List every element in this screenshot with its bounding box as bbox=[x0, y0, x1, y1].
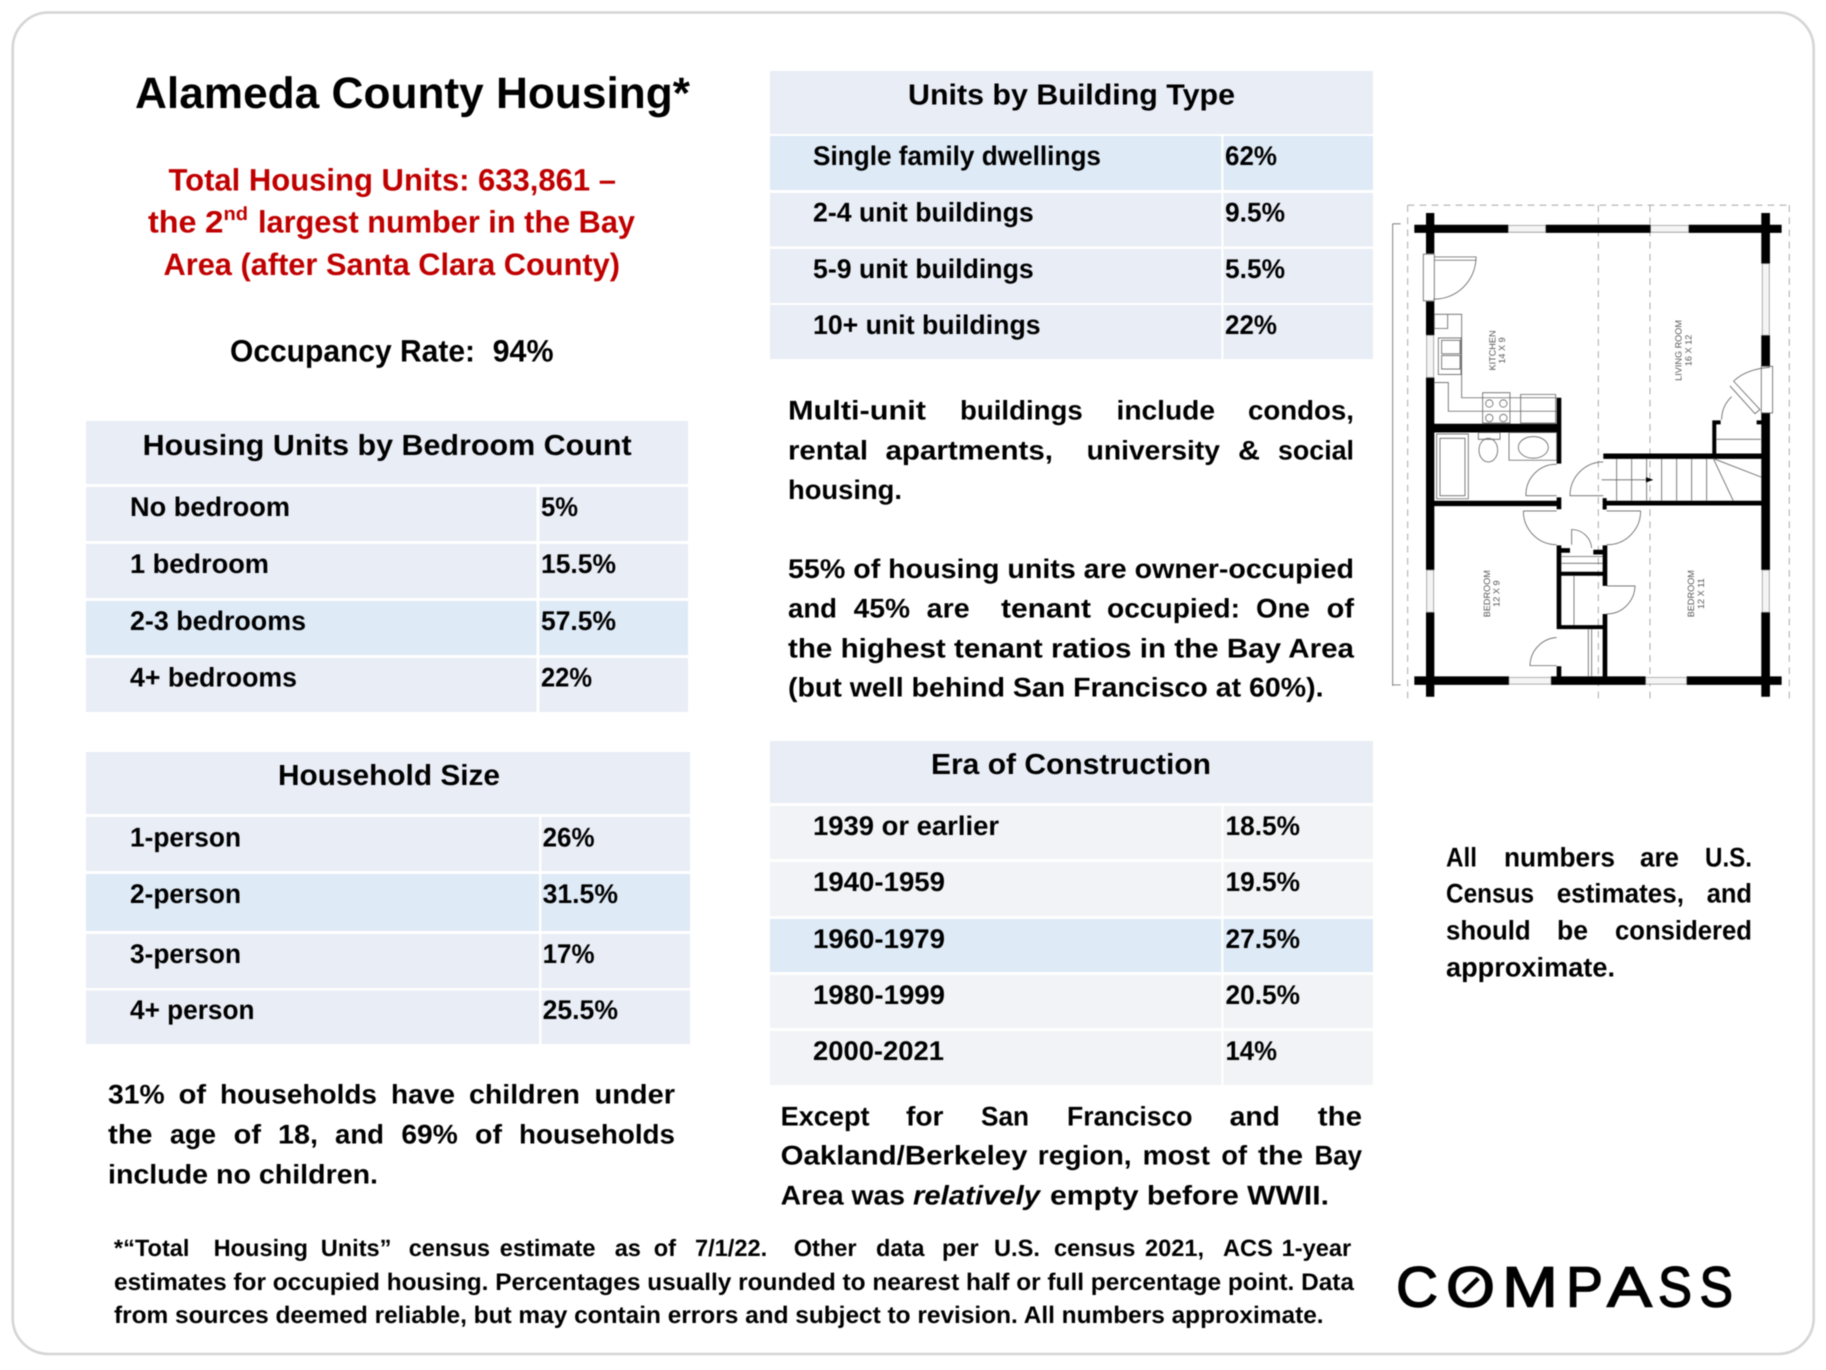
footnote: 1-year bbox=[1282, 1236, 1351, 1262]
footnote: estimate bbox=[500, 1236, 596, 1262]
text block: owner and tenant occupancy: and bbox=[788, 594, 837, 624]
row: 1939 or earlier: 18.5% bbox=[1226, 811, 1300, 841]
text block: owner and tenant occupancy: 55% of housing units are owner-occupied bbox=[788, 554, 1354, 584]
text block: multi-unit buildings: buildings bbox=[960, 396, 1083, 426]
row: 2-4 unit buildings bbox=[770, 193, 1373, 246]
row: 10+ unit buildings: 22% bbox=[1225, 310, 1277, 340]
row: no bedroom bbox=[86, 487, 688, 541]
footnote: census bbox=[409, 1236, 490, 1262]
row: 2-4 unit buildings: 9.5% bbox=[1225, 198, 1285, 228]
row: 1980-1999 bbox=[770, 975, 1373, 1028]
text block: owner and tenant occupancy: 45% bbox=[854, 594, 910, 624]
table header: Units by Building Type bbox=[908, 80, 1235, 112]
row: 1980-1999: 20.5% bbox=[1226, 980, 1300, 1010]
text block: multi-unit buildings: housing. bbox=[788, 475, 902, 505]
floor plan illustration: BEDROOM bbox=[1482, 570, 1492, 617]
row: 2000-2021: 14% bbox=[1226, 1036, 1277, 1066]
logo: Compass: A bbox=[1607, 1256, 1652, 1320]
logo: Compass: S bbox=[1700, 1256, 1733, 1320]
text block: owner and tenant occupancy: occupied: bbox=[1107, 594, 1240, 624]
row: 3-person: 3-person bbox=[130, 939, 241, 969]
row: 1960-1979 bbox=[770, 919, 1373, 972]
floor plan illustration: BEDROOM bbox=[1686, 570, 1696, 617]
row: 2-person: 31.5% bbox=[543, 879, 618, 909]
text block: multi-unit buildings: rental bbox=[788, 436, 868, 466]
footnote: 7/1/22. bbox=[695, 1236, 767, 1262]
text block: owner and tenant occupancy: tenant bbox=[1001, 594, 1091, 624]
text block: owner and tenant occupancy: are bbox=[927, 594, 970, 624]
callout: total housing units: the bbox=[148, 205, 196, 240]
logo: Compass: C bbox=[1396, 1256, 1438, 1320]
floor plan illustration: KITCHEN bbox=[1487, 330, 1497, 370]
text block: multi-unit buildings: university bbox=[1087, 436, 1220, 466]
table header: Household Size bbox=[278, 760, 500, 792]
text block: empty before WWII: the bbox=[1258, 1141, 1303, 1171]
row: 1960-1979: 27.5% bbox=[1226, 924, 1300, 954]
floor plan illustration: LIVING ROOM bbox=[1674, 320, 1684, 381]
callout: total housing units: nd bbox=[224, 204, 248, 225]
row: 1940-1959 bbox=[770, 862, 1373, 916]
text block: empty before WWII: region, bbox=[1038, 1141, 1132, 1171]
row: 2000-2021: 2000-2021 bbox=[813, 1036, 944, 1066]
text block: empty before WWII: and bbox=[1230, 1102, 1280, 1132]
text block: owner and tenant occupancy: of bbox=[1327, 594, 1355, 624]
row: 2-4 unit buildings: 2-4 unit buildings bbox=[813, 198, 1034, 228]
row: 10+ unit buildings: 10+ unit buildings bbox=[813, 310, 1041, 340]
text block: multi-unit buildings: include bbox=[1116, 396, 1215, 426]
text block: empty before WWII: most bbox=[1143, 1141, 1210, 1171]
text block: multi-unit buildings: condos, bbox=[1248, 396, 1354, 426]
text block: owner and tenant occupancy: (but well behind San Francisco at 60%). bbox=[788, 673, 1324, 703]
row: 2000-2021 bbox=[770, 1031, 1373, 1085]
text block: households with children: households bbox=[519, 1120, 675, 1150]
floor plan illustration: 12 X 11 bbox=[1696, 578, 1706, 609]
logo: Compass: M bbox=[1502, 1256, 1558, 1320]
row: no bedroom: No bedroom bbox=[130, 492, 290, 522]
panel: household size bbox=[86, 752, 690, 1044]
text block: census note: Census bbox=[1446, 879, 1534, 909]
row: 4+ person: 4+ person bbox=[130, 995, 254, 1025]
callout: total housing units: Total Housing Units: 633,861 – bbox=[168, 163, 616, 198]
text block: census note bbox=[1446, 843, 1752, 983]
table header: Era of Construction bbox=[931, 749, 1211, 781]
footnote: of bbox=[654, 1236, 676, 1262]
text block: households with children: 18, bbox=[278, 1120, 318, 1150]
floor plan illustration: 12 X 9 bbox=[1491, 580, 1501, 607]
footnote: census bbox=[1054, 1236, 1135, 1262]
footnote: per bbox=[942, 1236, 979, 1262]
row: 1 bedroom: 15.5% bbox=[541, 549, 616, 579]
row: 1 bedroom bbox=[86, 544, 688, 598]
row: single family dwellings bbox=[770, 136, 1373, 190]
logo: Compass: O bbox=[1446, 1256, 1495, 1320]
text block: households with children: of bbox=[179, 1080, 207, 1110]
row: 2-3 bedrooms: 57.5% bbox=[541, 606, 616, 636]
row: 4+ bedrooms: 4+ bedrooms bbox=[130, 662, 297, 692]
panel: units by building type bbox=[770, 71, 1373, 359]
row: 1940-1959: 1940-1959 bbox=[813, 867, 945, 897]
table header bbox=[770, 71, 1373, 134]
text block: empty before WWII: Oakland/Berkeley bbox=[781, 1141, 1028, 1171]
row: 1939 or earlier: 1939 or earlier bbox=[813, 811, 999, 841]
row: 1-person: 26% bbox=[543, 822, 595, 852]
text block: households with children: under bbox=[594, 1080, 676, 1110]
text block: households with children: include no children. bbox=[108, 1160, 378, 1190]
row: 2-3 bedrooms bbox=[86, 601, 688, 655]
occupancy rate: Occupancy Rate: bbox=[230, 334, 475, 369]
row: single family dwellings: 62% bbox=[1225, 141, 1277, 171]
text block: multi-unit buildings: social bbox=[1278, 436, 1354, 466]
callout: total housing units: 2 bbox=[205, 205, 224, 240]
table header bbox=[86, 752, 690, 814]
logo: Compass bbox=[1396, 1256, 1733, 1320]
row: 2-person bbox=[86, 874, 690, 931]
row: single family dwellings: Single family dwellings bbox=[813, 141, 1101, 171]
text block: census note: approximate. bbox=[1446, 953, 1615, 983]
text block: empty before WWII: empty before WWII. bbox=[1050, 1181, 1329, 1211]
row: 5-9 unit buildings bbox=[770, 249, 1373, 303]
floor plan illustration bbox=[1393, 205, 1789, 702]
floor plan illustration: 14 X 9 bbox=[1497, 337, 1507, 364]
row: 4+ bedrooms: 22% bbox=[541, 662, 592, 692]
footnote: *“Total bbox=[114, 1236, 189, 1262]
footnote: U.S. bbox=[994, 1236, 1040, 1262]
footnote: estimates for occupied housing. Percentages usually rounded to nearest half or full percentage point. Data bbox=[114, 1269, 1355, 1296]
text block: census note: are bbox=[1640, 843, 1679, 873]
text block: census note: considered bbox=[1615, 916, 1752, 946]
text block: census note: and bbox=[1707, 879, 1752, 909]
row: 4+ person: 25.5% bbox=[543, 995, 618, 1025]
text block: multi-unit buildings: Multi-unit bbox=[788, 396, 926, 426]
text block: households with children: children bbox=[469, 1080, 580, 1110]
text block: empty before WWII: Francisco bbox=[1067, 1102, 1192, 1132]
text block: households with children: of bbox=[475, 1120, 503, 1150]
text block: empty before WWII bbox=[781, 1102, 1362, 1211]
text block: census note: U.S. bbox=[1705, 843, 1752, 873]
text block: multi-unit buildings: & bbox=[1238, 436, 1260, 466]
text block: empty before WWII: San bbox=[981, 1102, 1029, 1132]
row: 1 bedroom: 1 bedroom bbox=[130, 549, 269, 579]
row: 1960-1979: 1960-1979 bbox=[813, 924, 945, 954]
row: 1939 or earlier bbox=[770, 806, 1373, 859]
text block: households with children: of bbox=[234, 1120, 262, 1150]
text block: census note: estimates, bbox=[1557, 879, 1684, 909]
table header bbox=[86, 421, 688, 484]
footnote: 2021, bbox=[1145, 1236, 1204, 1262]
text block: empty before WWII: relatively bbox=[913, 1181, 1042, 1211]
footnote: Other bbox=[794, 1236, 857, 1262]
text block: multi-unit buildings bbox=[788, 396, 1354, 505]
row: 10+ unit buildings bbox=[770, 305, 1373, 359]
text block: empty before WWII: of bbox=[1221, 1141, 1248, 1171]
row: no bedroom: 5% bbox=[541, 492, 578, 522]
text block: empty before WWII: Except bbox=[781, 1102, 870, 1132]
footnote: as bbox=[615, 1236, 641, 1262]
text block: census note: be bbox=[1557, 916, 1588, 946]
footnote: from sources deemed reliable, but may contain errors and subject to revision. All numbers approximate. bbox=[114, 1302, 1324, 1329]
row: 4+ person bbox=[86, 990, 690, 1044]
text block: empty before WWII: Bay bbox=[1314, 1141, 1362, 1171]
text block: households with children: and bbox=[335, 1120, 384, 1150]
row: 1-person: 1-person bbox=[130, 822, 241, 852]
text block: census note: numbers bbox=[1504, 843, 1615, 873]
text block: census note: All bbox=[1446, 843, 1477, 873]
footnote bbox=[114, 1236, 1355, 1329]
callout: total housing units: Area (after Santa Clara County) bbox=[164, 247, 620, 282]
table header: Housing Units by Bedroom Count bbox=[143, 430, 632, 462]
text block: empty before WWII: Area was bbox=[781, 1181, 905, 1211]
panel: housing units by bedroom count bbox=[86, 421, 688, 712]
panel: era of construction bbox=[770, 741, 1373, 1085]
footnote: ACS bbox=[1223, 1236, 1273, 1262]
footnote: Housing bbox=[214, 1236, 308, 1262]
text block: owner and tenant occupancy: the highest tenant ratios in the Bay Area bbox=[788, 634, 1355, 664]
row: 2-3 bedrooms: 2-3 bedrooms bbox=[130, 606, 306, 636]
text block: households with children bbox=[108, 1080, 676, 1190]
table header bbox=[770, 741, 1373, 803]
text block: owner and tenant occupancy: One bbox=[1256, 594, 1310, 624]
row: 5-9 unit buildings: 5.5% bbox=[1225, 254, 1285, 284]
logo: Compass: S bbox=[1658, 1256, 1692, 1320]
text block: empty before WWII: the bbox=[1318, 1102, 1362, 1132]
row: 5-9 unit buildings: 5-9 unit buildings bbox=[813, 254, 1034, 284]
row: 1940-1959: 19.5% bbox=[1226, 867, 1300, 897]
text block: households with children: 31% bbox=[108, 1080, 165, 1110]
logo: Compass: P bbox=[1566, 1256, 1603, 1320]
callout: total housing units bbox=[148, 163, 636, 282]
text block: census note: should bbox=[1446, 916, 1531, 946]
text block: households with children: the bbox=[108, 1120, 152, 1150]
occupancy rate: 94% bbox=[493, 334, 554, 369]
footnote: data bbox=[876, 1236, 925, 1262]
text block: multi-unit buildings: apartments, bbox=[886, 436, 1053, 466]
row: 4+ bedrooms bbox=[86, 658, 688, 712]
text block: empty before WWII: for bbox=[906, 1102, 944, 1132]
row: 2-person: 2-person bbox=[130, 879, 241, 909]
callout: total housing units: largest number in the Bay bbox=[258, 205, 636, 240]
text block: households with children: households bbox=[220, 1080, 377, 1110]
row: 1980-1999: 1980-1999 bbox=[813, 980, 945, 1010]
row: 3-person: 17% bbox=[543, 939, 595, 969]
text block: owner and tenant occupancy bbox=[788, 554, 1355, 703]
title: Alameda County Housing* bbox=[135, 69, 691, 118]
footnote: Units” bbox=[321, 1236, 391, 1262]
text block: households with children: 69% bbox=[401, 1120, 458, 1150]
row: 1-person bbox=[86, 817, 690, 871]
text block: households with children: age bbox=[170, 1120, 216, 1150]
row: 3-person bbox=[86, 934, 690, 988]
floor plan illustration: 16 X 12 bbox=[1684, 335, 1694, 366]
text block: households with children: have bbox=[391, 1080, 455, 1110]
